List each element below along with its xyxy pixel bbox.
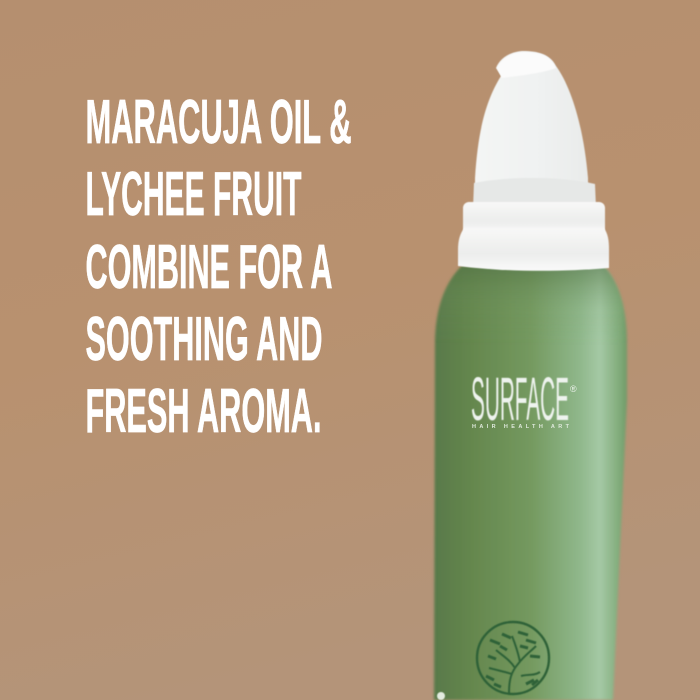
middle collar [463,202,605,234]
shoulder shading [435,266,627,345]
icon: tree emblem [477,622,549,694]
headline text: SOOTHING AND [86,305,322,374]
label text fragment [437,692,445,700]
bottle body [434,266,627,700]
tagline: HAIR HEALTH ART [472,424,570,430]
infographic canvas: MARACUJA OIL & [86,88,352,157]
headline text: COMBINE FOR A [86,233,332,302]
dispensing tip [497,52,556,78]
lower collar [458,228,609,271]
headline text [86,88,352,446]
product bottle [434,51,627,700]
dome cap [475,51,588,190]
registered mark: ® [570,384,577,394]
headline text: LYCHEE FRUIT [86,160,302,229]
upper collar [473,178,596,208]
headline text: FRESH AROMA. [86,377,322,446]
brand logo [471,365,577,433]
